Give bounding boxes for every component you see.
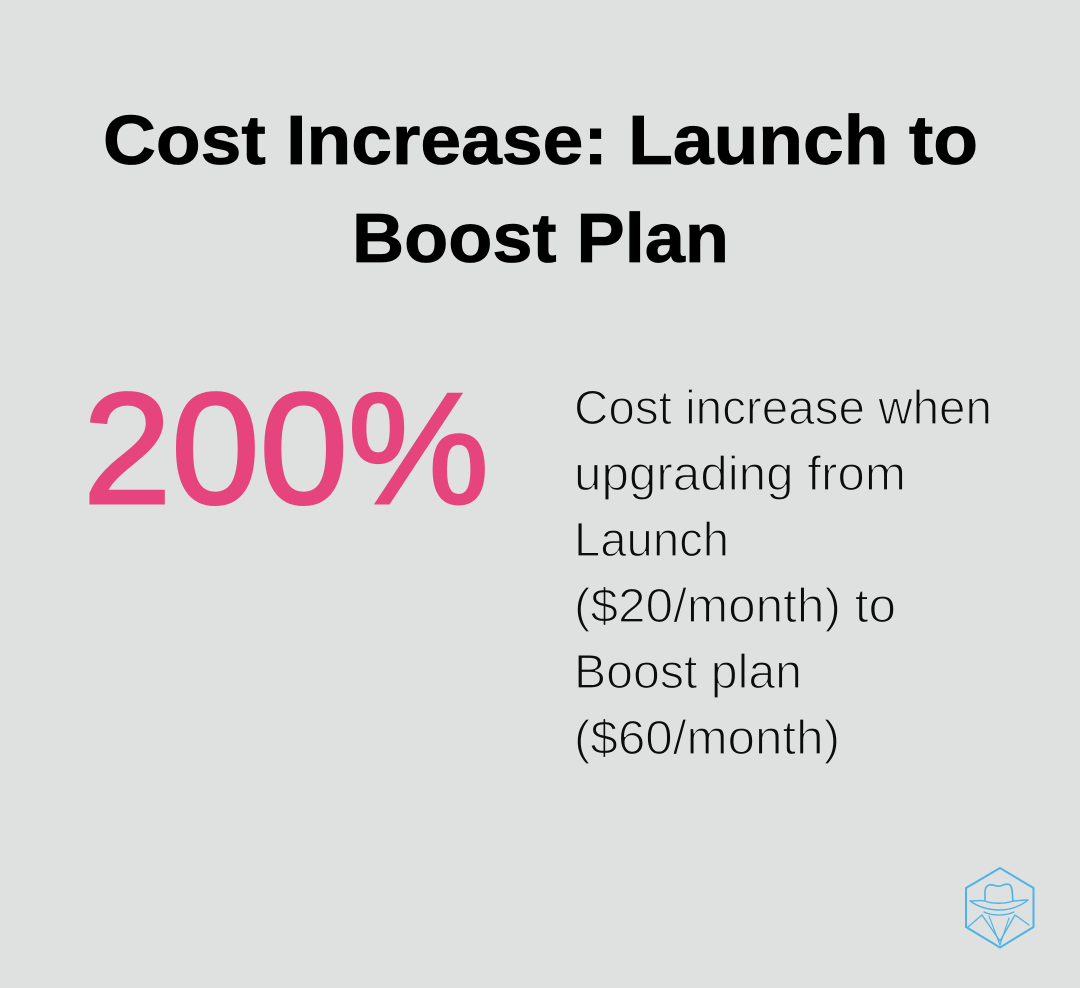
big statistic: 200%: 200% xyxy=(83,361,489,537)
title xyxy=(103,101,978,277)
description text: ($20/month) to xyxy=(574,580,896,633)
description text: Cost increase when xyxy=(574,382,992,435)
title: Boost Plan xyxy=(352,199,729,277)
icon: spy logo in hexagon xyxy=(966,868,1034,948)
description text: Boost plan xyxy=(574,646,802,699)
description text xyxy=(574,382,992,765)
description text: ($60/month) xyxy=(574,712,840,765)
description text: Launch xyxy=(574,514,729,567)
description text: upgrading from xyxy=(574,448,906,501)
title: Cost Increase: Launch to xyxy=(103,101,978,179)
